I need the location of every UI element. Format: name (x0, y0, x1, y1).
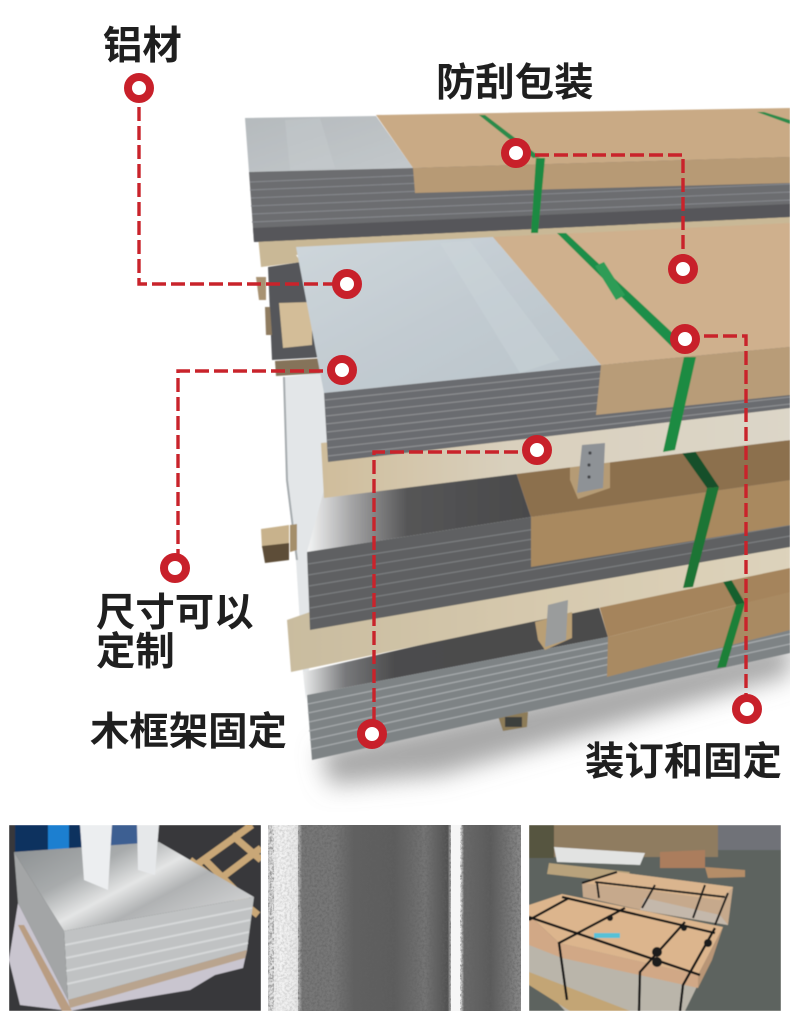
label: 尺寸可以定制: 定制 (96, 630, 175, 674)
timber beam 2 with bracket (321, 400, 790, 499)
timber beam 3 with bracket (287, 540, 790, 672)
left backing sheets and timber (256, 262, 528, 731)
label: 防刮包装: 防刮包装 (436, 61, 594, 105)
callout line: 铝材 (139, 88, 347, 284)
callout line: 防刮包装 (516, 155, 683, 269)
callout line: 尺寸可以定制 (178, 371, 342, 568)
marker: sheet corner (331, 359, 353, 381)
marker: 防刮包装 on cardboard (672, 258, 694, 280)
stack 3 (third layer) (307, 440, 790, 630)
marker: 防刮包装 strap (505, 142, 527, 164)
callout line: 木框架固定 (374, 452, 537, 734)
stack 1 (top) (245, 108, 790, 242)
stack 2 (second layer) (296, 223, 790, 462)
label: 木框架固定: 木框架固定 (90, 710, 287, 754)
marker: 尺寸可以定制 (164, 557, 186, 579)
label: 尺寸可以定制 (96, 591, 254, 674)
marker: green strap (674, 328, 696, 350)
photo: brushed metal texture (268, 825, 521, 1011)
photo: packed pallets in warehouse (529, 825, 781, 1011)
callout line: 装订和固定 (685, 336, 746, 709)
marker: timber beam (526, 439, 548, 461)
ground shadow (320, 640, 790, 785)
marker: 木框架固定 (361, 723, 383, 745)
main photo: stacks of aluminium sheets (245, 108, 790, 785)
marker: 铝材 on sheet (336, 273, 358, 295)
stack 4 (bottom layer) (303, 558, 790, 760)
label: 装订和固定: 装订和固定 (585, 740, 782, 784)
timber under stack 1 (258, 205, 790, 267)
marker: 铝材 top (128, 77, 150, 99)
label: 铝材: 铝材 (103, 24, 182, 68)
marker: 装订和固定 (736, 698, 758, 720)
label: 尺寸可以定制: 尺寸可以 (96, 591, 254, 635)
photo: aluminium sheet stack (9, 825, 261, 1011)
